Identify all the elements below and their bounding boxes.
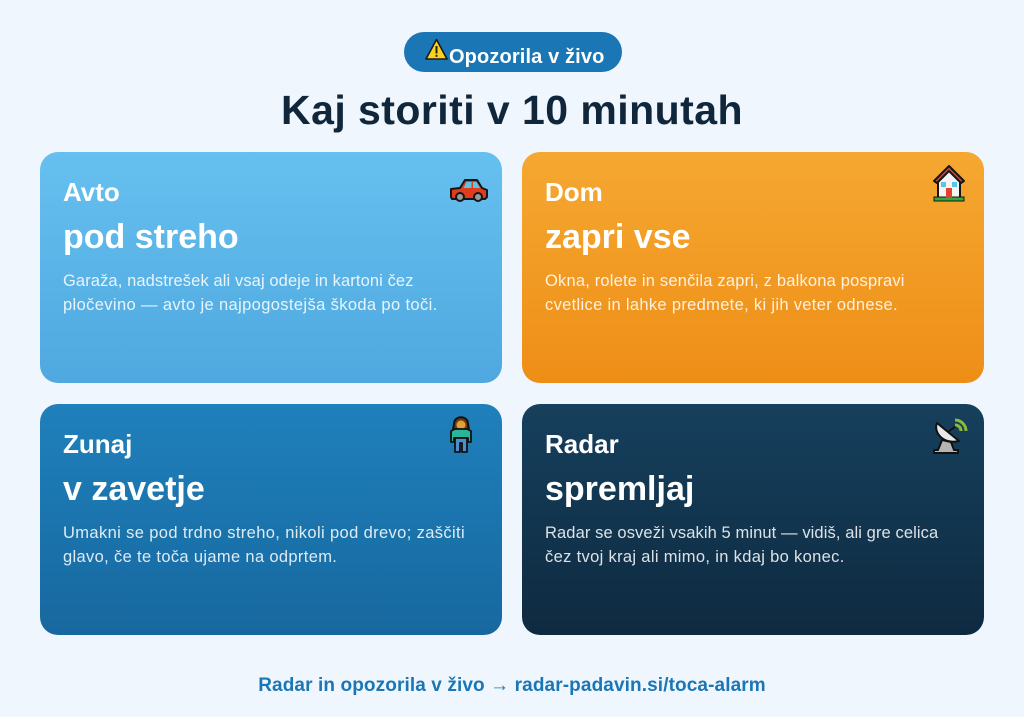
icon: car xyxy=(450,179,488,202)
panel label: Zunaj xyxy=(63,429,132,459)
footer link: Radar in opozorila v živo → radar-padavin.si/toca-alarm xyxy=(258,675,766,696)
panel text: pločevino — avto je najpogostejša škoda po toči. xyxy=(63,296,438,314)
icon: house xyxy=(933,165,965,202)
panel heading: v zavetje xyxy=(63,470,205,508)
panel text xyxy=(545,272,905,314)
icon: warning sign xyxy=(425,38,448,60)
panel text xyxy=(63,524,465,566)
panel text xyxy=(63,272,438,314)
panel text: glavo, če te toča ujame na odprtem. xyxy=(63,548,337,566)
panel label: Dom xyxy=(545,177,603,207)
badge: live alerts xyxy=(404,32,622,72)
panel text: Radar se osveži vsakih 5 minut — vidiš, ali gre celica xyxy=(545,524,938,542)
panel text: Okna, rolete in senčila zapri, z balkona pospravi xyxy=(545,272,905,290)
panel label: Radar xyxy=(545,429,619,459)
panel heading: pod streho xyxy=(63,218,239,256)
panel: car xyxy=(40,152,502,383)
panel text xyxy=(545,524,938,566)
panel text: Garaža, nadstrešek ali vsaj odeje in kartoni čez xyxy=(63,272,414,290)
panel text: čez tvoj kraj ali mimo, in kdaj bo konec. xyxy=(545,548,845,566)
panel heading: spremljaj xyxy=(545,470,694,508)
panel text: cvetlice in lahke predmete, ki jih veter odnese. xyxy=(545,296,898,314)
badge label: Opozorila v živo xyxy=(449,46,604,68)
panel: home xyxy=(522,152,984,383)
panel: outdoors xyxy=(40,404,502,635)
icon: satellite dish xyxy=(933,418,968,454)
title: Kaj storiti v 10 minutah xyxy=(281,87,743,133)
icon: person xyxy=(450,416,472,453)
panel heading: zapri vse xyxy=(545,218,691,256)
panel label: Avto xyxy=(63,177,120,207)
panel: radar xyxy=(522,404,984,635)
panel text: Umakni se pod trdno streho, nikoli pod drevo; zaščiti xyxy=(63,524,465,542)
